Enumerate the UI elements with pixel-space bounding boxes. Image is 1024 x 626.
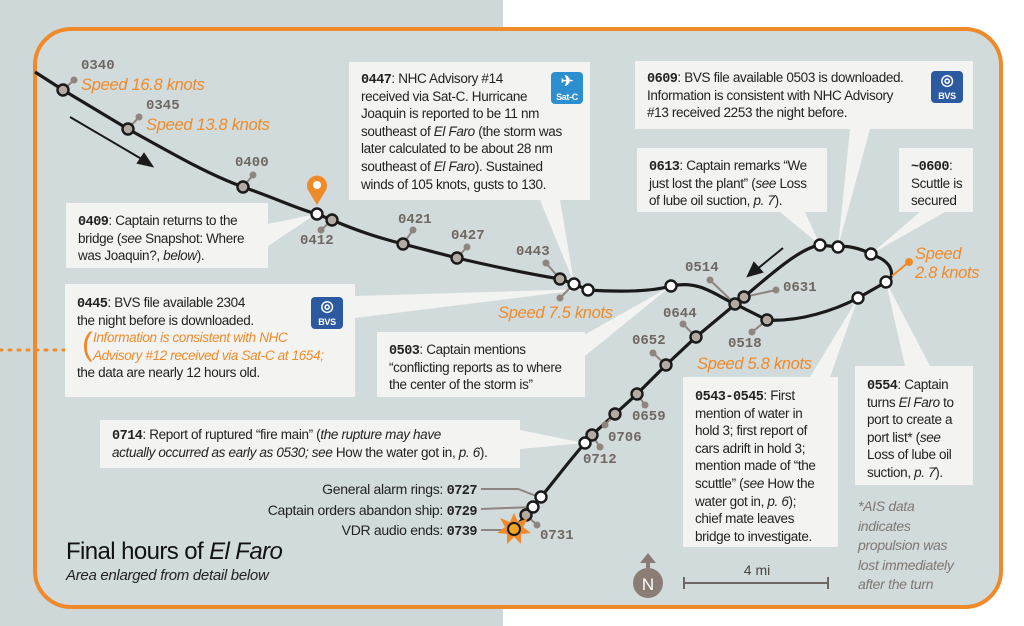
icon: BVS: BVS xyxy=(938,91,956,101)
final events labels: General alarm rings: 0727 xyxy=(322,481,477,499)
speed labels: Speed 16.8 knots xyxy=(81,76,205,94)
text: 0659 xyxy=(632,409,666,425)
icon: location pin xyxy=(307,176,327,205)
direction arrows xyxy=(70,117,783,276)
callout: 0445: Information is consistent with NHC xyxy=(93,330,287,345)
text: 0345 xyxy=(146,98,180,114)
callout: 0554: port to create a xyxy=(867,412,952,427)
callout: 0600: ~0600: xyxy=(911,158,952,175)
callout: 0554: turns El Faro to xyxy=(867,395,954,410)
icon: BVS: ◎ xyxy=(941,72,953,89)
callout: 0503 xyxy=(377,332,585,397)
text: Speed 5.8 knots xyxy=(697,355,812,373)
text: 0421 xyxy=(398,212,432,228)
callout: 0503: the center of the storm is” xyxy=(389,377,533,392)
icon: Sat-C xyxy=(551,72,583,104)
time labels: 0340 xyxy=(81,58,115,74)
callout: 0445: Advisory #12 received via Sat-C at 1654; xyxy=(93,348,324,363)
callout: 0409: bridge (see Snapshot: Where xyxy=(78,231,244,246)
text: 0644 xyxy=(663,306,697,322)
text: 0412 xyxy=(300,233,334,249)
callout: 0609: 0609: BVS file available 0503 is downloaded. xyxy=(647,70,904,87)
callout: 0543-0545: cars adrift in hold 3; xyxy=(695,441,805,456)
final events labels: VDR audio ends: 0739 xyxy=(342,522,477,540)
icon: BVS xyxy=(311,297,343,329)
callout: 0543-0545: hold 3; first report of xyxy=(695,423,807,438)
footnote AIS: *AIS data xyxy=(858,498,914,514)
callout: 0609: Information is consistent with NHC Advisory xyxy=(647,88,893,103)
callout: 0409: 0409: Captain returns to the xyxy=(78,213,237,230)
callout: 0714 xyxy=(100,420,520,468)
callout: 0447: Joaquin is reported to be 11 nm xyxy=(361,106,539,121)
icon: BVS: BVS xyxy=(318,317,336,327)
callout: 0503: “conflicting reports as to where xyxy=(389,360,562,375)
callout: 0554 xyxy=(855,366,973,485)
callout: 0445: ( xyxy=(82,326,92,362)
text: 0706 xyxy=(608,430,642,446)
title: Final hours of El Faro xyxy=(66,538,282,565)
callout: 0600 xyxy=(899,148,973,212)
text: Speed xyxy=(915,245,961,263)
text: Speed 13.8 knots xyxy=(146,116,270,134)
text: 0427 xyxy=(451,228,485,244)
icon: BVS: ◎ xyxy=(321,298,333,315)
callout: 0543-0545: bridge to investigate. xyxy=(695,529,812,544)
leader stubs xyxy=(63,78,778,530)
callout: 0613: just lost the plant” (see Loss xyxy=(649,176,807,191)
callout: 0543-0545: mention made of “the xyxy=(695,458,816,473)
text: 0731 xyxy=(540,528,574,544)
callout: 0554: 0554: Captain xyxy=(867,377,948,394)
footnote AIS: propulsion was xyxy=(858,537,947,553)
final events labels: Captain orders abandon ship: 0729 xyxy=(268,502,477,520)
callout: 0543-0545: water got in, p. 6); xyxy=(695,494,796,509)
callout: 0600: Scuttle is xyxy=(911,176,962,191)
dotted line left xyxy=(0,348,68,352)
text: 0443 xyxy=(516,244,550,260)
text: 0518 xyxy=(728,336,762,352)
callout: 0409 xyxy=(66,203,268,268)
footnote AIS: indicates xyxy=(858,518,911,534)
callout: 0714: actually occurred as early as 0530; see How the water got in, p. 6). xyxy=(112,445,487,460)
callout: 0609 xyxy=(635,61,973,129)
icon: BVS xyxy=(931,71,963,103)
callout: 0613: 0613: Captain remarks “We xyxy=(649,158,807,175)
icon: Sat-C: Sat-C xyxy=(556,92,578,102)
footnote AIS: after the turn xyxy=(858,576,933,592)
text: 0712 xyxy=(583,452,617,468)
icon: sinking star xyxy=(497,513,531,544)
callout: 0503: 0503: Captain mentions xyxy=(389,342,526,359)
subtitle: Area enlarged from detail below xyxy=(66,567,268,584)
callout: 0554: suction, p. 7). xyxy=(867,465,943,480)
callout: 0613 xyxy=(637,148,827,212)
footnote AIS: lost immediately xyxy=(858,556,954,572)
callout: 0445: the night before is downloaded. xyxy=(77,313,254,328)
footnote AIS xyxy=(858,498,954,592)
text: 0631 xyxy=(783,280,817,296)
text: Speed 7.5 knots xyxy=(498,304,613,322)
callout: 0445 xyxy=(65,284,355,397)
callout: 0600: secured xyxy=(911,193,957,208)
callout: 0409: was Joaquin?, below). xyxy=(78,248,204,263)
callout: 0447: winds of 105 knots, gusts to 130. xyxy=(361,177,546,192)
text: 2.8 knots xyxy=(915,264,979,282)
callout: 0613: of lube oil suction, p. 7). xyxy=(649,193,782,208)
callout: 0554: port list* (see xyxy=(867,430,941,445)
callout: 0543-0545: mention of water in xyxy=(695,406,802,421)
callout: 0445: the data are nearly 12 hours old. xyxy=(77,365,260,380)
scale bar: 4 mi xyxy=(744,562,770,578)
north icon: N xyxy=(642,575,654,594)
callout: 0447 xyxy=(349,62,590,200)
callout: 0445: 0445: BVS file available 2304 xyxy=(77,295,245,312)
callout: 0447: later calculated to be about 28 nm xyxy=(361,141,552,156)
callout: 0447: southeast of El Faro (the storm was xyxy=(361,124,562,139)
callout: 0543-0545: chief mate leaves xyxy=(695,511,794,526)
callout: 0447: 0447: NHC Advisory #14 xyxy=(361,71,503,88)
track xyxy=(35,72,892,529)
callout: 0543-0545 xyxy=(683,377,838,547)
background gray left xyxy=(0,0,503,626)
track nodes gray xyxy=(58,84,772,520)
icon: Sat-C: ✈ xyxy=(561,73,573,90)
callout: 0554: Loss of lube oil xyxy=(867,447,951,462)
text: 0652 xyxy=(632,333,666,349)
final events labels xyxy=(268,481,477,540)
track nodes white xyxy=(312,208,892,512)
callout: 0543-0545: scuttle” (see How the xyxy=(695,476,814,491)
callout: 0447: received via Sat-C. Hurricane xyxy=(361,89,527,104)
callout: 0609: #13 received 2253 the night before. xyxy=(647,105,847,120)
callout: 0714: 0714: Report of ruptured “fire main” (the rupture may have xyxy=(112,427,441,444)
callout: 0447: southeast of El Faro). Sustained xyxy=(361,159,543,174)
north icon xyxy=(633,553,663,598)
text: 0514 xyxy=(685,260,719,276)
text: 0400 xyxy=(235,155,269,171)
callout: 0543-0545: 0543-0545: First xyxy=(695,388,795,405)
